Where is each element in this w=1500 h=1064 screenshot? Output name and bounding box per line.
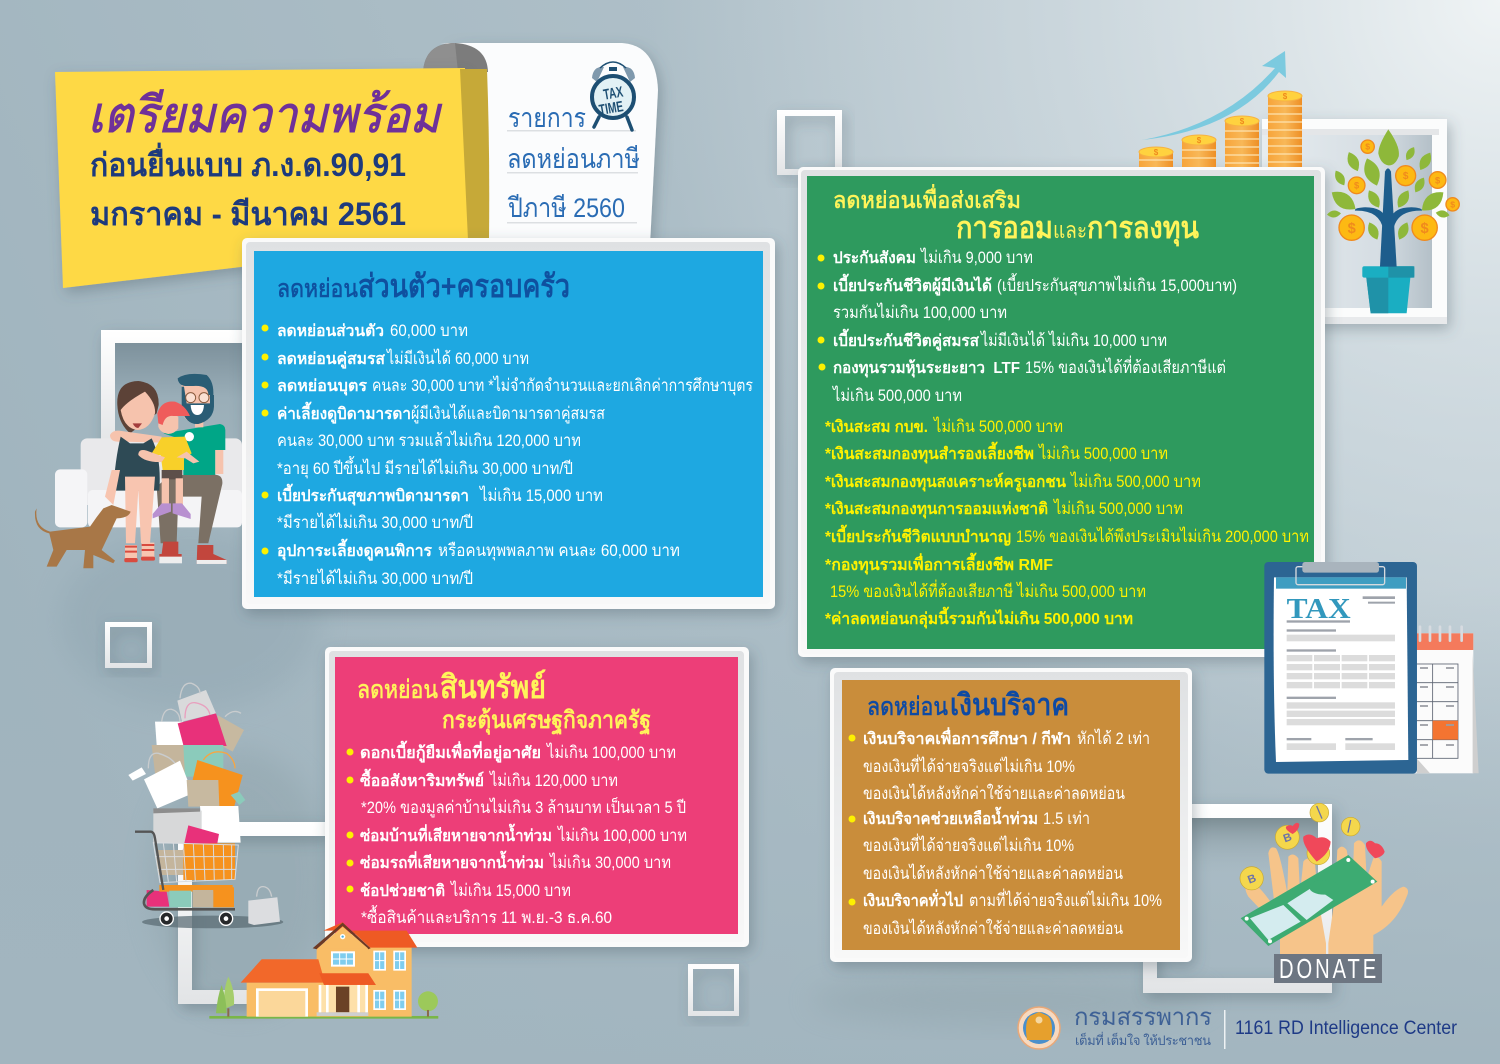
illustration: calendar xyxy=(1413,627,1479,773)
list: insurance and LTF items: (เบี้ยประกันสุขภาพไม่เกิน 15,000บาท) xyxy=(997,273,1237,296)
list: donation items: เงินบริจาคช่วยเหลือน้ำท่วม xyxy=(863,806,1038,828)
frame behind family xyxy=(101,330,246,453)
icon: coin stacks: $ xyxy=(1154,148,1159,157)
coins: $ xyxy=(1450,199,1455,209)
coins xyxy=(1339,140,1459,240)
icon: rising arrow xyxy=(1142,51,1286,140)
cart shadow xyxy=(142,916,283,928)
list: personal and family items: ลดหย่อนส่วนตัว xyxy=(277,322,384,340)
list: asset items: ซ่อมรถที่เสียหายจากน้ำท่วม xyxy=(360,850,544,872)
list: donation items: ของเงินได้หลังหักค่าใช้จ่ายและค่าลดหย่อน xyxy=(863,918,1123,938)
coins: $ xyxy=(1354,181,1360,191)
trees xyxy=(216,977,438,1017)
icon: coin stacks: $ xyxy=(1240,117,1245,126)
list: donation items: ของเงินได้หลังหักค่าใช้จ่ายและค่าลดหย่อน xyxy=(863,783,1125,803)
sofa xyxy=(55,438,242,527)
paper list line 2: ลดหย่อนภาษี xyxy=(507,144,640,174)
heading: assets and economic stimulus: สินทรัพย์ xyxy=(440,669,546,705)
list: personal and family items: ไม่เกิน 15,000 บาท xyxy=(478,485,603,505)
form lines xyxy=(1287,596,1395,750)
list: donation items: ของเงินได้หลังหักค่าใช้จ่ายและค่าลดหย่อน xyxy=(863,863,1123,883)
list: personal and family items: เบี้ยประกันสุขภาพบิดามารดา xyxy=(277,483,469,506)
heading: savings and investment xyxy=(833,184,1199,247)
decorative square frame left xyxy=(105,622,152,668)
subtitle: form name: ก่อนยื่นแบบ ภ.ง.ด.90,91 xyxy=(90,142,406,183)
list: personal and family items: 60,000 บาท xyxy=(390,321,468,340)
cart wheels xyxy=(160,912,233,925)
list: donation items: ของเงินที่ได้จ่ายจริงแต่ไม่เกิน 10% xyxy=(863,754,1075,776)
dog xyxy=(35,505,131,568)
icon: tax time alarm clock xyxy=(592,62,635,130)
list: asset items: ซื้ออสังหาริมทรัพย์ xyxy=(360,768,484,790)
list: asset items: ซ่อมบ้านที่เสียหายจากน้ำท่วม xyxy=(360,823,552,845)
heading: assets and economic stimulus: กระตุ้นเศรษฐกิจภาครัฐ xyxy=(442,707,651,736)
list: insurance and LTF items: เบี้ยประกันชีวิตคู่สมรส xyxy=(833,328,979,352)
tax heading: TAX xyxy=(1287,594,1351,625)
heading: donations xyxy=(867,689,1069,722)
list: personal and family items: *มีรายได้ไม่เกิน 30,000 บาท/ปี xyxy=(277,568,473,588)
footer: department name: เต็มที่ เต็มใจ ให้ประชาชน xyxy=(1075,1031,1211,1048)
list: insurance and LTF items: ประกันสังคม xyxy=(833,249,916,267)
heading: personal and family: ลดหย่อน xyxy=(277,275,358,303)
list: retirement savings items: *เงินสะสมกองทุนการออมแห่งชาติ xyxy=(825,500,1048,519)
list: personal and family items: หรือคนทุพพลภาพ คนละ 60,000 บาท xyxy=(438,541,680,561)
list: asset items xyxy=(346,740,687,927)
list: retirement savings items: *เบี้ยประกันชีวิตแบบบำนาญ xyxy=(825,524,1011,547)
illustration: shopping cart with bags xyxy=(128,683,283,928)
coins and hearts xyxy=(1240,803,1385,890)
paper list line 3: ปีภาษี 2560 xyxy=(508,193,625,223)
leaves xyxy=(1327,129,1450,242)
list: retirement savings items: *เงินสะสมกองทุนสงเคราะห์ครูเอกชน xyxy=(825,472,1066,493)
coins: $ xyxy=(1421,221,1429,237)
panel: savings and investment deductions xyxy=(798,167,1325,657)
list: retirement savings items: *กองทุนรวมเพื่อการเลี้ยงชีพ RMF xyxy=(825,552,1053,575)
child xyxy=(138,401,199,519)
list: insurance and LTF items: เบี้ยประกันชีวิตผู้มีเงินได้ xyxy=(833,273,992,297)
house body xyxy=(241,922,417,1017)
list: personal and family items: คนละ 30,000 บาท รวมแล้วไม่เกิน 120,000 บาท xyxy=(277,430,581,450)
decorative square frame top centre xyxy=(777,110,842,175)
illustration: house xyxy=(209,922,438,1019)
list: personal and family items: *อายุ 60 ปีขึ้นไป มีรายได้ไม่เกิน 30,000 บาท/ปี xyxy=(277,456,573,479)
list: insurance and LTF items: 15% ของเงินได้ที่ต้องเสียภาษีแต่ xyxy=(1025,355,1226,377)
footer: contact centre: 1161 RD Intelligence Center xyxy=(1235,1017,1457,1039)
icon: coin stacks: $ xyxy=(1283,92,1288,101)
coins: $ xyxy=(1348,221,1356,237)
list: retirement savings items: *ค่าลดหย่อนกลุ่มนี้รวมกันไม่เกิน 500,000 บาท xyxy=(825,606,1133,629)
list: asset items: ดอกเบี้ยกู้ยืมเพื่อที่อยู่อาศัย xyxy=(360,740,541,764)
heading: donations: เงินบริจาค xyxy=(950,689,1069,722)
yellow title note xyxy=(55,68,489,288)
coins and hearts: B xyxy=(1282,831,1294,845)
footer: department name: กรมสรรพากร xyxy=(1074,1004,1212,1031)
list: retirement savings items xyxy=(825,416,1309,629)
list: personal and family items xyxy=(262,321,753,588)
panel: personal and family deductions xyxy=(242,238,775,609)
trunk and branches xyxy=(1355,168,1422,267)
list: asset items: ไม่เกิน 120,000 บาท xyxy=(488,770,618,790)
coins: $ xyxy=(1365,142,1370,152)
list: donation items: ของเงินที่ได้จ่ายจริงแต่ไม่เกิน 10% xyxy=(863,833,1074,855)
list: retirement savings items: *เงินสะสมกองทุนสำรองเลี้ยงชีพ xyxy=(825,441,1034,464)
list: insurance and LTF items xyxy=(818,247,1237,405)
list: personal and family items: ค่าเลี้ยงดูบิดามารดา xyxy=(277,401,411,425)
list: asset items: ไม่เกิน 15,000 บาท xyxy=(449,880,571,900)
list: personal and family items: ไม่มีเงินได้ 60,000 บาท xyxy=(385,348,529,368)
footer: revenue department seal xyxy=(1018,1007,1060,1049)
list: insurance and LTF items: ไม่เกิน 500,000 บาท xyxy=(831,385,962,405)
heading: savings and investment: ลดหย่อนเพื่อส่งเสริม xyxy=(833,184,1021,213)
list: donation items xyxy=(848,727,1162,938)
heading: assets and economic stimulus xyxy=(357,669,651,736)
paper list line 1: รายการ xyxy=(508,103,586,133)
list: retirement savings items: ไม่เกิน 500,000 บาท xyxy=(1037,443,1168,463)
list: asset items: ไม่เกิน 30,000 บาท xyxy=(548,852,671,872)
list: retirement savings items: ไม่เกิน 500,000 บาท xyxy=(1069,471,1201,491)
heading: personal and family xyxy=(277,268,570,304)
father xyxy=(157,374,227,564)
icon: tax time alarm clock: TAX xyxy=(602,82,625,103)
bag handles xyxy=(148,683,272,897)
coins: $ xyxy=(1403,171,1409,182)
illustration: family on sofa xyxy=(35,374,242,568)
list: asset items: *ซื้อสินค้าและบริการ 11 พ.ย.-3 ธ.ค.60 xyxy=(361,905,612,927)
frame behind donate hands xyxy=(1143,804,1332,993)
banknote xyxy=(1241,855,1377,946)
list: retirement savings items: ไม่เกิน 500,000 บาท xyxy=(932,416,1063,436)
list: personal and family items: *มีรายได้ไม่เกิน 30,000 บาท/ปี xyxy=(277,512,473,532)
list: asset items: *20% ของมูลค่าบ้านไม่เกิน 3 ล้านบาท เป็นเวลา 5 ปี xyxy=(361,796,686,818)
heading: assets and economic stimulus: ลดหย่อน xyxy=(357,676,438,704)
list: personal and family items: อุปการะเลี้ยงดูคนพิการ xyxy=(277,538,432,562)
icon: coin stacks xyxy=(1139,91,1302,167)
icon: money tree xyxy=(1327,129,1459,313)
decorative square frame bottom xyxy=(688,964,739,1016)
list: personal and family items: คนละ 30,000 บาท *ไม่จำกัดจำนวนและยกเลิกค่าการศึกษาบุตร xyxy=(372,375,753,396)
paper scroll: tax list xyxy=(423,43,658,245)
panel: donation deductions xyxy=(830,668,1192,962)
heading: personal and family: ส่วนตัว+ครอบครัว xyxy=(358,268,570,304)
coins: $ xyxy=(1435,175,1441,185)
frame behind cart and house xyxy=(178,822,328,1004)
hands xyxy=(1245,840,1408,955)
mother xyxy=(105,381,162,562)
donate label: DONATE xyxy=(1279,954,1376,985)
heading: savings and investment: และ xyxy=(1053,217,1087,243)
list: retirement savings items: ไม่เกิน 500,000 บาท xyxy=(1052,498,1183,518)
cart basket and frame xyxy=(135,832,238,909)
footer: department name xyxy=(1074,1004,1212,1048)
list: retirement savings items: 15% ของเงินได้ที่ต้องเสียภาษี ไม่เกิน 500,000 บาท xyxy=(830,579,1146,601)
list: asset items: ไม่เกิน 100,000 บาท xyxy=(556,825,687,845)
heading: donations: ลดหย่อน xyxy=(867,693,948,721)
panel: asset deductions xyxy=(325,647,749,947)
list: retirement savings items: 15% ของเงินได้พึงประเมินไม่เกิน 200,000 บาท xyxy=(1016,526,1309,546)
frame behind money tree xyxy=(1262,119,1447,324)
shopping bags xyxy=(128,690,280,925)
list: insurance and LTF items: ไม่มีเงินได้ ไม่เกิน 10,000 บาท xyxy=(979,330,1167,350)
list: donation items: หักได้ 2 เท่า xyxy=(1077,728,1150,748)
list: asset items: ไม่เกิน 100,000 บาท xyxy=(545,742,676,762)
list: donation items: ตามที่ได้จ่ายจริงแต่ไม่เกิน 10% xyxy=(969,888,1162,910)
subtitle: period: มกราคม - มีนาคม 2561 xyxy=(90,196,406,232)
list: insurance and LTF items: ไม่เกิน 9,000 บาท xyxy=(919,247,1033,267)
list: donation items: เงินบริจาคเพื่อการศึกษา / กีฬา xyxy=(863,727,1071,748)
list: personal and family items: ลดหย่อนคู่สมรส xyxy=(277,351,385,370)
clipboard clip xyxy=(1296,562,1385,585)
illustration: donating hands xyxy=(1240,803,1408,955)
coins and hearts: B xyxy=(1246,873,1258,887)
icon: tax time alarm clock: TIME xyxy=(598,97,625,119)
list: donation items: 1.5 เท่า xyxy=(1043,809,1090,828)
icon: coin stacks: $ xyxy=(1197,136,1202,145)
heading: savings and investment: การออม xyxy=(956,212,1053,245)
list: insurance and LTF items: รวมกันไม่เกิน 100,000 บาท xyxy=(833,302,1007,322)
list: personal and family items: ผู้มีเงินได้และบิดามารดาคู่สมรส xyxy=(411,403,606,424)
heading: savings and investment: การลงทุน xyxy=(1087,212,1199,247)
list: retirement savings items: *เงินสะสม กบข. xyxy=(825,418,928,436)
list: donation items: เงินบริจาคทั่วไป xyxy=(863,889,963,910)
title: script heading: เตรียมความพร้อม xyxy=(88,87,443,143)
list: personal and family items: ลดหย่อนบุตร xyxy=(277,378,367,396)
pot xyxy=(1362,266,1414,313)
list: insurance and LTF items: กองทุนรวมหุ้นระยะยาว LTF xyxy=(833,359,1020,378)
illustration: tax clipboard xyxy=(1264,562,1417,774)
list: asset items: ช้อปช่วยชาติ xyxy=(360,882,445,900)
